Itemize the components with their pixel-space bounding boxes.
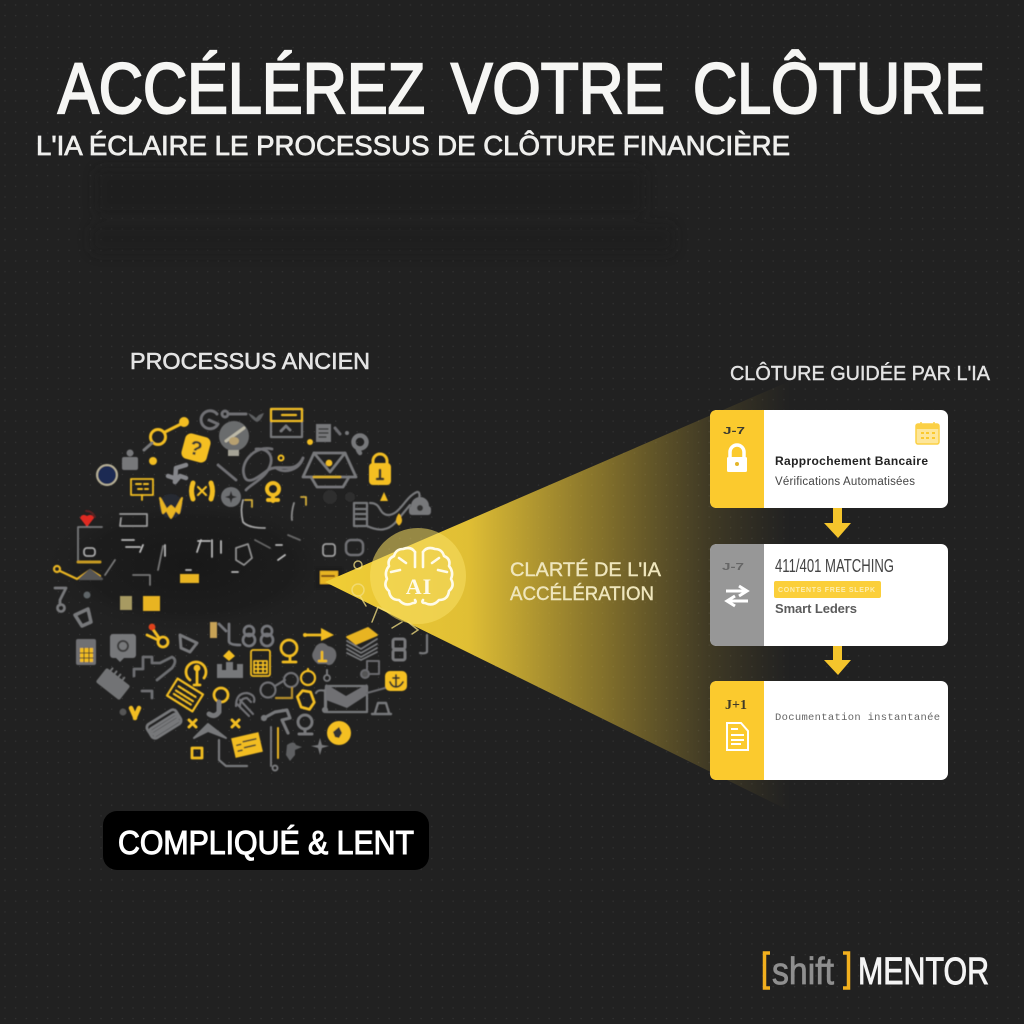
- icon: grey star circle: [221, 487, 241, 507]
- icon: grey sparkle: [311, 738, 329, 755]
- icons washed under beam: [352, 561, 418, 634]
- AI glow circle: [370, 528, 466, 624]
- yellow highlight tag: [774, 581, 881, 598]
- faint ghost text blocks: [90, 168, 675, 254]
- label: J-7 grey: J-7: [722, 562, 745, 573]
- icon: window panel: [271, 409, 302, 437]
- text: AI clarity label: ACCÉLÉRATION: [510, 582, 654, 605]
- dark smudge in cluster centre: [40, 495, 340, 635]
- icon: grey bag: [180, 635, 197, 652]
- icon: grey crown with diamond: [217, 650, 243, 678]
- icon: butterfly: [159, 494, 183, 518]
- icon: grey dot: [120, 708, 126, 716]
- logo: shift mentor: [764, 951, 989, 993]
- icon: tablet outline: [78, 527, 102, 562]
- icon: linked circles: [260, 673, 298, 698]
- icon: tilted yellow keypad: [167, 679, 203, 711]
- title: VOTRE: [451, 50, 665, 129]
- icon: yellow blob star: [327, 721, 351, 745]
- icon: grey G ring: [201, 411, 246, 429]
- icon: cloud: [409, 497, 431, 515]
- icon: corner mark: [142, 691, 152, 698]
- icon: chat bubble: [110, 634, 136, 662]
- icon: yellow drop: [396, 514, 402, 525]
- icon: location pin: [354, 436, 366, 453]
- heading: old process: PROCESSUS ANCIEN: [130, 348, 370, 374]
- icon: grey arcs: [236, 693, 254, 716]
- icon: grey table: [372, 703, 391, 714]
- icon: yellow ring: [301, 669, 315, 685]
- icon: yellow ring with grey hook: [209, 688, 228, 716]
- card 1: bank reconciliation: [710, 410, 948, 508]
- icon: yellow cross marks: [189, 720, 239, 727]
- icon: grey and yellow calculator: [76, 639, 96, 665]
- icon: grey J: [420, 635, 427, 653]
- icon: music phone: [361, 661, 379, 678]
- icon: grey B: [393, 639, 405, 660]
- logo: shift mentor: shift: [772, 951, 834, 993]
- icon cluster: chaotic old process: [54, 409, 431, 770]
- icon: yellow lock at beam start: [315, 567, 343, 589]
- yellow highlight tag: CONTENTS FREE SLEPK: [778, 587, 875, 594]
- white smudged fragments in centre: [105, 497, 363, 585]
- heading: AI-guided close: CLÔTURE GUIDÉE PAR L'IA: [730, 362, 991, 385]
- icon: ring dot: [278, 456, 284, 460]
- icon: yellow lock: [369, 454, 391, 485]
- text: card 1 subtitle: Vérifications Automatisées: [775, 476, 915, 488]
- icon: small yellow marker: [380, 492, 388, 501]
- icon: bracket x: [192, 483, 212, 499]
- icon: grey bulb: [219, 421, 249, 456]
- icon: yellow Y: [131, 708, 139, 718]
- icon: yellow arrow: [303, 628, 334, 641]
- icon: white lock: [727, 445, 747, 472]
- icon: doc with cable to cloud: [354, 492, 420, 530]
- icon: blue gem: [97, 465, 117, 485]
- icon: yellow square: [192, 748, 202, 758]
- light beam: [325, 381, 800, 816]
- icon: grey lock: [122, 450, 138, 470]
- icon: ladder hook: [316, 690, 327, 712]
- title: ACCÉLÉREZ: [58, 50, 425, 129]
- icon: yellow board: [131, 479, 153, 500]
- icons: dim clouds: [323, 490, 355, 504]
- icon: grey hook: [55, 588, 90, 612]
- icon: yellow scissors stick: [147, 625, 168, 647]
- icon: yellow zigzag chart: [54, 566, 102, 579]
- text: card 1 title: Rapprochement Bancaire: [775, 454, 928, 468]
- icon: red heart: [80, 511, 95, 527]
- arrow 2: [824, 646, 851, 675]
- icon: grey mirror: [298, 715, 312, 734]
- card 3: documentation: [710, 681, 948, 780]
- text: AI: AI: [406, 574, 432, 599]
- icon: yellow mirror: [281, 640, 297, 662]
- logo: shift mentor: MENTOR: [858, 951, 989, 993]
- subtitle: L'IA ÉCLAIRE LE PROCESSUS DE CLÔTURE FINANCIÈRE: [36, 130, 790, 161]
- icon: question badge: [180, 432, 212, 464]
- text: smart leders: Smart Leders: [775, 601, 857, 616]
- text: AI clarity label: [510, 558, 661, 605]
- icon: document: [316, 424, 349, 442]
- icon: grey music note: [168, 465, 186, 482]
- icon: rounded pentagon: [75, 609, 91, 626]
- icon: yellow anchor badge: [385, 671, 407, 691]
- icon: apple: [149, 457, 157, 465]
- icon: yellow ticket: [231, 732, 263, 758]
- label: J+1: J+1: [725, 698, 747, 713]
- label: J-7: J-7: [723, 426, 746, 437]
- title: CLÔTURE: [693, 50, 985, 129]
- icon: grey node blob: [262, 710, 290, 733]
- icon: document: [727, 723, 748, 750]
- card 2: matching: [710, 544, 948, 646]
- icon: question badge: ?: [187, 437, 204, 461]
- icon: grey L-eight shapes: [219, 624, 273, 646]
- icon: grey blob: [286, 742, 302, 761]
- text: AI clarity label: CLARTÉ DE L'IA: [510, 558, 661, 581]
- icon: step line: [134, 657, 175, 680]
- dull yellow bars in smudge: [120, 574, 217, 638]
- icon: yellow hex: [296, 688, 316, 712]
- icon: roof with pipe: [194, 724, 247, 766]
- icon: swap arrows: [726, 586, 748, 606]
- icon: open tray envelope: [303, 453, 356, 487]
- icon: yellow key circle: [186, 662, 206, 685]
- icon: grey bird: [248, 413, 264, 422]
- icon: yellow calculator: [251, 650, 270, 676]
- icon: layers stack: [347, 628, 377, 660]
- icon: yellow ring key: [267, 483, 279, 501]
- icon: notebook: [96, 665, 132, 700]
- icon: tangled cable: [218, 448, 303, 490]
- icon: envelope: [326, 684, 385, 712]
- icon: arrow line and yellow bar: [271, 727, 278, 770]
- arrow 1: [824, 508, 851, 538]
- badge: complicated and slow: [103, 811, 429, 870]
- text: instant documentation: Documentation instantanée: [775, 712, 940, 724]
- text: matching heading: 411/401 MATCHING: [775, 556, 894, 576]
- icon: yellow node line: [144, 418, 188, 450]
- icon: yellow dot: [307, 439, 313, 445]
- badge: complicated and slow: COMPLIQUÉ & LENT: [118, 824, 414, 861]
- icon: paper stack: [145, 708, 183, 740]
- icon: calendar: [916, 422, 939, 444]
- icon: grey blob with yellow pawn: [312, 643, 336, 681]
- icon: AI brain: [385, 548, 453, 604]
